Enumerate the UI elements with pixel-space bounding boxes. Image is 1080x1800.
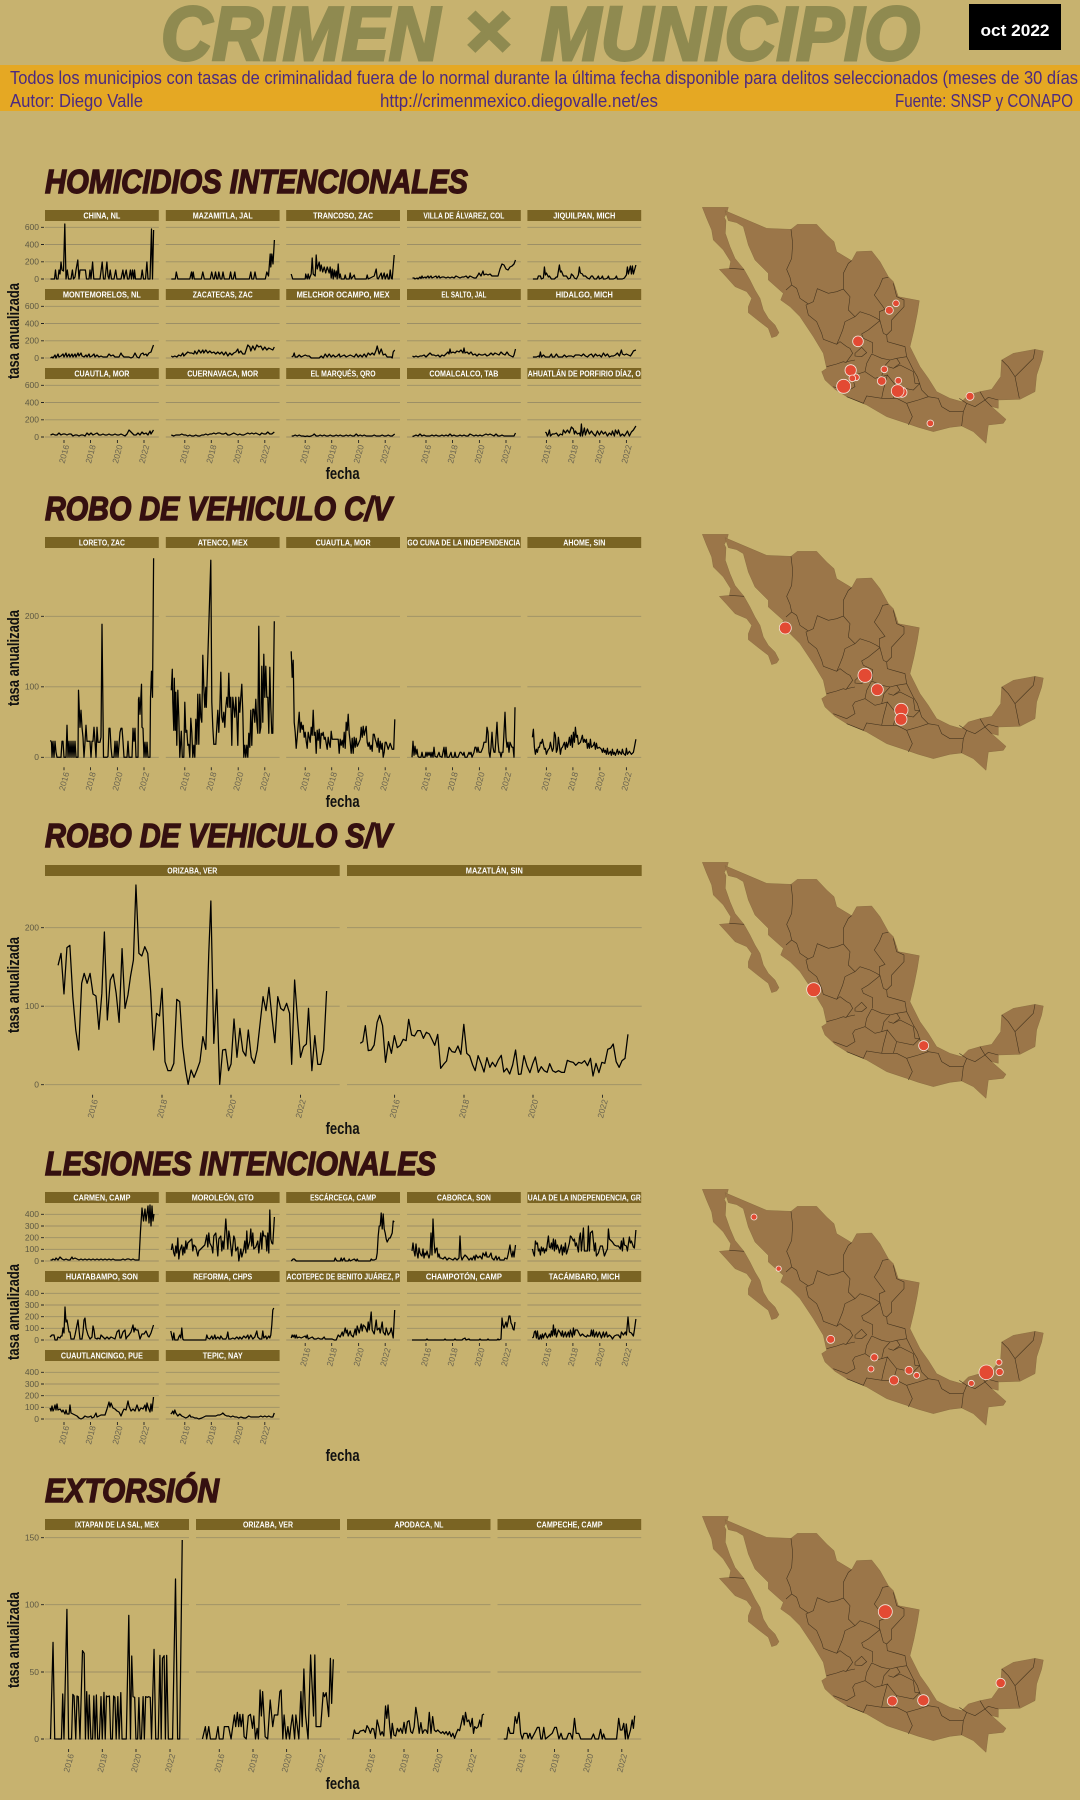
- facet: CHAMPOTÓN, CAMP: 2020: [472, 1346, 487, 1367]
- facet: REFORMA, CHPS: [166, 1271, 280, 1340]
- section: lesiones intencionales: [4, 1146, 641, 1465]
- facet: TEPIC, NAY: 2020: [231, 1424, 246, 1445]
- facet: CUERNAVACA, MOR: CUERNAVACA, MOR: [187, 368, 258, 378]
- facet: CUAUTLA, MOR: CUAUTLA, MOR: [316, 537, 371, 547]
- facet: MAZATLÁN, SIN: 2018: [457, 1098, 471, 1119]
- facet: APODACA, NL: 2022: [464, 1752, 479, 1773]
- facet: ZACATECAS, ZAC: [166, 289, 280, 358]
- facet: REFORMA, CHPS: REFORMA, CHPS: [193, 1271, 252, 1281]
- facet: CUAUTLA, MOR: 2016: [57, 443, 71, 464]
- facet: HUATABAMPO, SON: 0: [34, 1335, 39, 1345]
- facet: IXTAPAN DE LA SAL, MEX: 2016: [61, 1752, 76, 1773]
- facet: LORETO, ZAC: 2016: [57, 771, 71, 792]
- facet: CUAUTLA, MOR: 2020: [351, 771, 366, 792]
- title: [161, 0, 920, 77]
- facet: TEPIC, NAY: [166, 1350, 280, 1445]
- facet: IXTAPAN DE LA SAL, MEX: 50: [30, 1667, 39, 1677]
- facet: TEPIC, NAY: 2018: [204, 1424, 219, 1445]
- facet: TLAHUATLÁN DE PORFIRIO DÍAZ, O: 2020: [593, 443, 607, 464]
- facet: CAMPECHE, CAMP: 2018: [547, 1752, 562, 1773]
- facet: CUAUTLA, MOR: [25, 368, 159, 464]
- facet: LORETO, ZAC: 2020: [110, 771, 125, 792]
- facet: IXTAPAN DE LA SAL, MEX: 0: [34, 1734, 39, 1744]
- facet: ORIZABA, VER: 2018: [246, 1752, 260, 1773]
- facet: COMALCALCO, TAB: 2020: [472, 443, 487, 464]
- y-axis title: tasa anualizada: [4, 1592, 23, 1688]
- facet: MAZATLÁN, SIN: 2022: [595, 1098, 610, 1119]
- facet: HIDALGO, MICH: [527, 289, 641, 358]
- facet: DOLORES HIDALGO CUNA DE LA INDEPENDENCIA: 2022: [499, 771, 513, 792]
- facet: IGUALA DE LA INDEPENDENCIA, GR: UALA DE LA INDEPENDENCIA, GR: [528, 1192, 641, 1202]
- facet: CARMEN, CAMP: 300: [25, 1221, 39, 1231]
- facet: TLAHUATLÁN DE PORFIRIO DÍAZ, O: AHUATLÁN DE PORFIRIO DÍAZ, O: [528, 368, 641, 378]
- facet: TACÁMBARO, MICH: 2018: [566, 1346, 580, 1367]
- facet: DOLORES HIDALGO CUNA DE LA INDEPENDENCIA: [407, 537, 521, 792]
- facet: AHOME, SIN: AHOME, SIN: [563, 537, 605, 547]
- facet: TLAHUATLÁN DE PORFIRIO DÍAZ, O: 2022: [619, 443, 634, 464]
- facet: EL SALTO, JAL: [407, 289, 521, 358]
- facet: CHINA, NL: 400: [25, 239, 39, 249]
- facet: ORIZABA, VER: 2022: [293, 1098, 308, 1119]
- facet: IGUALA DE LA INDEPENDENCIA, GR: [527, 1192, 641, 1261]
- facet: IXTAPAN DE LA SAL, MEX: IXTAPAN DE LA SAL, MEX: [75, 1519, 159, 1529]
- facet: TEPIC, NAY: 2016: [178, 1424, 192, 1445]
- facet: ORIZABA, VER: [25, 865, 340, 1119]
- facet: CHINA, NL: 200: [25, 257, 39, 267]
- facet: DOLORES HIDALGO CUNA DE LA INDEPENDENCIA: GO CUNA DE LA INDEPENDENCIA: [407, 537, 520, 547]
- y-axis title: tasa anualizada: [4, 937, 23, 1033]
- facet: HUATABAMPO, SON: 300: [25, 1300, 39, 1310]
- facet: ATENCO, MEX: 2016: [178, 771, 192, 792]
- y-axis title: tasa anualizada: [4, 610, 23, 706]
- facet: ORIZABA, VER: 2020: [224, 1098, 238, 1119]
- facet: ORIZABA, VER: ORIZABA, VER: [243, 1519, 293, 1529]
- facet: AHOME, SIN: 2020: [593, 771, 607, 792]
- facet: HUATABAMPO, SON: 400: [25, 1288, 39, 1298]
- facet: CABORCA, SON: [407, 1192, 521, 1261]
- facet: ATENCO, MEX: 2022: [258, 771, 272, 792]
- facet: CUAUTLANCINGO, PUE: 100: [25, 1402, 39, 1412]
- facet: EL SALTO, JAL: EL SALTO, JAL: [441, 289, 486, 299]
- facet: APODACA, NL: 2018: [397, 1752, 411, 1773]
- facet: LORETO, ZAC: 200: [25, 611, 39, 621]
- facet: HUATABAMPO, SON: HUATABAMPO, SON: [66, 1271, 138, 1281]
- heading: homicidios: HOMICIDIOS INTENCIONALES: [45, 164, 468, 201]
- facet: COMALCALCO, TAB: 2016: [419, 443, 433, 464]
- facet: CUAUTLANCINGO, PUE: CUAUTLANCINGO, PUE: [61, 1350, 143, 1360]
- facet: MONTEMORELOS, NL: 0: [34, 353, 39, 363]
- facet: ORIZABA, VER: 2016: [212, 1752, 227, 1773]
- facet: AHOME, SIN: 2022: [619, 771, 634, 792]
- facet: ACATEPEC DE BENITO JUÁREZ, P: 2020: [351, 1346, 366, 1367]
- x-axis title: fecha: [326, 1119, 360, 1138]
- facet: CUAUTLA, MOR: 0: [34, 432, 39, 442]
- facet: MAZAMITLA, JAL: MAZAMITLA, JAL: [193, 210, 253, 220]
- facet: CUAUTLANCINGO, PUE: 2016: [57, 1424, 71, 1445]
- facet: CAMPECHE, CAMP: CAMPECHE, CAMP: [536, 1519, 603, 1529]
- facet: APODACA, NL: APODACA, NL: [394, 1519, 444, 1529]
- facet: CUERNAVACA, MOR: 2018: [204, 443, 219, 464]
- facet: ORIZABA, VER: 0: [34, 1079, 39, 1089]
- facet: TRANCOSO, ZAC: [286, 210, 400, 279]
- section: robo de vehiculo s/v: [4, 818, 642, 1138]
- facet: HUATABAMPO, SON: 100: [25, 1323, 39, 1333]
- facet: COMALCALCO, TAB: 2022: [499, 443, 513, 464]
- facet: CHINA, NL: [25, 210, 159, 284]
- facet: TLAHUATLÁN DE PORFIRIO DÍAZ, O: 2016: [539, 443, 554, 464]
- facet: EL MARQUÉS, QRO: EL MARQUÉS, QRO: [311, 368, 376, 378]
- facet: APODACA, NL: [347, 1519, 490, 1773]
- facet: VILLA DE ÁLVAREZ, COL: VILLA DE ÁLVAREZ, COL: [423, 210, 504, 220]
- facet: JIQUILPAN, MICH: JIQUILPAN, MICH: [553, 210, 615, 220]
- facet: CUAUTLA, MOR: 2022: [378, 771, 393, 792]
- facet: TLAHUATLÁN DE PORFIRIO DÍAZ, O: [527, 368, 641, 464]
- facet: MONTEMORELOS, NL: MONTEMORELOS, NL: [63, 289, 141, 299]
- subtitle bar: Autor: Diego Valle: [10, 91, 143, 111]
- section: extorsión: [4, 1472, 641, 1793]
- facet: ORIZABA, VER: 2020: [279, 1752, 294, 1773]
- facet: EL MARQUÉS, QRO: 2022: [378, 443, 393, 464]
- facet: ATENCO, MEX: 2018: [204, 771, 219, 792]
- facet: MONTEMORELOS, NL: [25, 289, 159, 363]
- section: homicidios intencionales: [4, 164, 641, 483]
- facet: MELCHOR OCAMPO, MEX: MELCHOR OCAMPO, MEX: [297, 289, 390, 299]
- facet: CUAUTLA, MOR: CUAUTLA, MOR: [74, 368, 129, 378]
- facet: CHAMPOTÓN, CAMP: 2022: [499, 1346, 513, 1367]
- facet: EL MARQUÉS, QRO: 2016: [298, 443, 313, 464]
- facet: LORETO, ZAC: [25, 537, 159, 792]
- facet: ACATEPEC DE BENITO JUÁREZ, P: 2016: [298, 1346, 313, 1367]
- x-axis title: fecha: [326, 464, 360, 483]
- facet: CARMEN, CAMP: 200: [25, 1232, 39, 1242]
- facet: CUAUTLANCINGO, PUE: 2022: [137, 1424, 151, 1445]
- y-axis title: tasa anualizada: [4, 1264, 23, 1360]
- facet: CUAUTLANCINGO, PUE: 300: [25, 1379, 39, 1389]
- facet: MONTEMORELOS, NL: 600: [25, 301, 39, 311]
- facet: CABORCA, SON: CABORCA, SON: [437, 1192, 491, 1202]
- facet: ATENCO, MEX: 2020: [231, 771, 246, 792]
- facet: ORIZABA, VER: ORIZABA, VER: [167, 865, 217, 875]
- facet: CUERNAVACA, MOR: 2020: [231, 443, 246, 464]
- map: robo de vehiculo s/v: [702, 862, 1043, 1098]
- facet: AHOME, SIN: [527, 537, 641, 792]
- facet: MAZATLÁN, SIN: 2020: [526, 1098, 540, 1119]
- facet: LORETO, ZAC: LORETO, ZAC: [79, 537, 125, 547]
- facet: MAZATLÁN, SIN: MAZATLÁN, SIN: [466, 865, 523, 875]
- facet: CHINA, NL: 0: [34, 274, 39, 284]
- facet: CARMEN, CAMP: [25, 1192, 159, 1266]
- facet: CUAUTLA, MOR: 2020: [110, 443, 125, 464]
- facet: ORIZABA, VER: 2016: [85, 1098, 100, 1119]
- facet: ORIZABA, VER: [196, 1519, 340, 1773]
- map: homicidios: [702, 207, 1043, 443]
- heading: robo s/v: ROBO DE VEHICULO S/V: [45, 818, 394, 855]
- facet: CUAUTLA, MOR: 2022: [137, 443, 151, 464]
- facet: TEPIC, NAY: 2022: [258, 1424, 272, 1445]
- facet: TACÁMBARO, MICH: 2020: [593, 1346, 607, 1367]
- facet: CUAUTLA, MOR: 200: [25, 415, 39, 425]
- facet: CUAUTLA, MOR: 2018: [324, 771, 339, 792]
- facet: ATENCO, MEX: ATENCO, MEX: [198, 537, 248, 547]
- facet: LORETO, ZAC: 100: [25, 682, 39, 692]
- facet: CUERNAVACA, MOR: [166, 368, 280, 464]
- facet: CHINA, NL: CHINA, NL: [83, 210, 120, 220]
- facet: CUAUTLANCINGO, PUE: 0: [34, 1414, 39, 1424]
- heading: robo c/v: ROBO DE VEHICULO C/V: [45, 491, 394, 528]
- facet: DOLORES HIDALGO CUNA DE LA INDEPENDENCIA: 2020: [472, 771, 487, 792]
- facet: ACATEPEC DE BENITO JUÁREZ, P: 2022: [378, 1346, 393, 1367]
- heading: extorsión: EXTORSIÓN: [45, 1472, 220, 1510]
- facet: CUAUTLA, MOR: [286, 537, 400, 792]
- section: robo de vehiculo c/v: [4, 491, 641, 811]
- heading: lesiones: LESIONES INTENCIONALES: [45, 1146, 436, 1183]
- facet: MONTEMORELOS, NL: 400: [25, 318, 39, 328]
- facet: COMALCALCO, TAB: 2018: [445, 443, 460, 464]
- facet: ACATEPEC DE BENITO JUÁREZ, P: 2018: [324, 1346, 339, 1367]
- facet: LORETO, ZAC: 2018: [83, 771, 98, 792]
- facet: ESCÁRCEGA, CAMP: [286, 1192, 400, 1261]
- facet: ZACATECAS, ZAC: ZACATECAS, ZAC: [193, 289, 253, 299]
- facet: CUAUTLA, MOR: 600: [25, 380, 39, 390]
- facet: ORIZABA, VER: 2018: [155, 1098, 169, 1119]
- facet: MAZATLÁN, SIN: 2016: [387, 1098, 402, 1119]
- subtitle bar: http://crimenmexico.diegovalle.net/es: [380, 91, 658, 111]
- facet: DOLORES HIDALGO CUNA DE LA INDEPENDENCIA: 2016: [419, 771, 433, 792]
- facet: IXTAPAN DE LA SAL, MEX: 2018: [95, 1752, 110, 1773]
- facet: MAZATLÁN, SIN: [347, 865, 642, 1119]
- facet: CAMPECHE, CAMP: 2022: [615, 1752, 629, 1773]
- facet: ORIZABA, VER: 2022: [313, 1752, 328, 1773]
- facet: JIQUILPAN, MICH: [527, 210, 641, 279]
- facet: CUAUTLA, MOR: 400: [25, 397, 39, 407]
- facet: ORIZABA, VER: 200: [25, 922, 39, 932]
- facet: CHAMPOTÓN, CAMP: 2016: [419, 1346, 433, 1367]
- facet: IXTAPAN DE LA SAL, MEX: 2020: [129, 1752, 143, 1773]
- facet: TACÁMBARO, MICH: TACÁMBARO, MICH: [549, 1271, 620, 1281]
- facet: CUAUTLANCINGO, PUE: 2018: [83, 1424, 98, 1445]
- facet: ACATEPEC DE BENITO JUÁREZ, P: [286, 1271, 400, 1367]
- facet: CARMEN, CAMP: CARMEN, CAMP: [73, 1192, 131, 1202]
- facet: COMALCALCO, TAB: [407, 368, 521, 464]
- facet: IXTAPAN DE LA SAL, MEX: 2022: [163, 1752, 177, 1773]
- facet: HIDALGO, MICH: HIDALGO, MICH: [556, 289, 613, 299]
- facet: APODACA, NL: 2016: [363, 1752, 378, 1773]
- map: robo de vehiculo c/v: [702, 534, 1043, 770]
- facet: CUAUTLA, MOR: 2018: [83, 443, 98, 464]
- x-axis title: fecha: [326, 1446, 360, 1465]
- facet: CHAMPOTÓN, CAMP: CHAMPOTÓN, CAMP: [426, 1270, 502, 1281]
- facet: COMALCALCO, TAB: COMALCALCO, TAB: [429, 368, 498, 378]
- facet: HUATABAMPO, SON: 200: [25, 1312, 39, 1322]
- x-axis title: fecha: [326, 1774, 360, 1793]
- facet: HUATABAMPO, SON: [25, 1271, 159, 1345]
- facet: IXTAPAN DE LA SAL, MEX: 150: [25, 1532, 39, 1542]
- facet: AHOME, SIN: 2018: [566, 771, 580, 792]
- facet: MELCHOR OCAMPO, MEX: [286, 289, 400, 358]
- facet: EL MARQUÉS, QRO: 2020: [351, 443, 366, 464]
- facet: TACÁMBARO, MICH: 2022: [619, 1346, 634, 1367]
- map: lesiones intencionales: [702, 1189, 1043, 1425]
- facet: DOLORES HIDALGO CUNA DE LA INDEPENDENCIA: 2018: [445, 771, 460, 792]
- facet: IXTAPAN DE LA SAL, MEX: [25, 1519, 189, 1773]
- facet: CUAUTLANCINGO, PUE: 400: [25, 1367, 39, 1377]
- facet: ACATEPEC DE BENITO JUÁREZ, P: ACOTEPEC DE BENITO JUÁREZ, P: [287, 1271, 400, 1281]
- facet: MOROLEÓN, GTO: MOROLEÓN, GTO: [192, 1191, 254, 1202]
- facet: MONTEMORELOS, NL: 200: [25, 336, 39, 346]
- facet: APODACA, NL: 2020: [430, 1752, 445, 1773]
- facet: EL MARQUÉS, QRO: 2018: [324, 443, 339, 464]
- facet: LORETO, ZAC: 0: [34, 752, 39, 762]
- facet: CARMEN, CAMP: 0: [34, 1256, 39, 1266]
- facet: CARMEN, CAMP: 100: [25, 1244, 39, 1254]
- date badge: [969, 4, 1061, 50]
- x-axis title: fecha: [326, 792, 360, 811]
- facet: CHINA, NL: 600: [25, 222, 39, 232]
- facet: ESCÁRCEGA, CAMP: ESCÁRCEGA, CAMP: [310, 1192, 376, 1202]
- facet: CAMPECHE, CAMP: 2020: [581, 1752, 595, 1773]
- facet: TEPIC, NAY: TEPIC, NAY: [203, 1350, 243, 1360]
- facet: LORETO, ZAC: 2022: [137, 771, 151, 792]
- y-axis title: tasa anualizada: [4, 283, 23, 379]
- facet: EL MARQUÉS, QRO: [286, 368, 400, 464]
- facet: CARMEN, CAMP: 400: [25, 1209, 39, 1219]
- facet: CAMPECHE, CAMP: 2016: [514, 1752, 528, 1773]
- facet: CUERNAVACA, MOR: 2022: [258, 443, 272, 464]
- facet: TACÁMBARO, MICH: 2016: [539, 1346, 554, 1367]
- facet: AHOME, SIN: 2016: [539, 771, 554, 792]
- facet: CHAMPOTÓN, CAMP: [407, 1270, 521, 1367]
- facet: MOROLEÓN, GTO: [166, 1191, 280, 1261]
- facet: CUAUTLA, MOR: 2016: [298, 771, 313, 792]
- facet: MAZAMITLA, JAL: [166, 210, 280, 279]
- facet: VILLA DE ÁLVAREZ, COL: [407, 210, 521, 279]
- facet: CHAMPOTÓN, CAMP: 2018: [445, 1346, 460, 1367]
- facet: CAMPECHE, CAMP: [498, 1519, 641, 1773]
- facet: CUAUTLANCINGO, PUE: 200: [25, 1390, 39, 1400]
- facet: TLAHUATLÁN DE PORFIRIO DÍAZ, O: 2018: [566, 443, 580, 464]
- facet: TACÁMBARO, MICH: [527, 1271, 641, 1367]
- facet: TRANCOSO, ZAC: TRANCOSO, ZAC: [313, 210, 373, 220]
- subtitle bar: [0, 65, 1080, 111]
- facet: IXTAPAN DE LA SAL, MEX: 100: [25, 1600, 39, 1610]
- facet: CUAUTLANCINGO, PUE: [25, 1350, 159, 1445]
- date badge: oct 2022: [980, 21, 1050, 40]
- facet: ATENCO, MEX: [166, 537, 280, 792]
- facet: CUAUTLANCINGO, PUE: 2020: [110, 1424, 125, 1445]
- map: extorsión: [702, 1516, 1043, 1752]
- facet: CUERNAVACA, MOR: 2016: [178, 443, 192, 464]
- facet: ORIZABA, VER: 100: [25, 1001, 39, 1011]
